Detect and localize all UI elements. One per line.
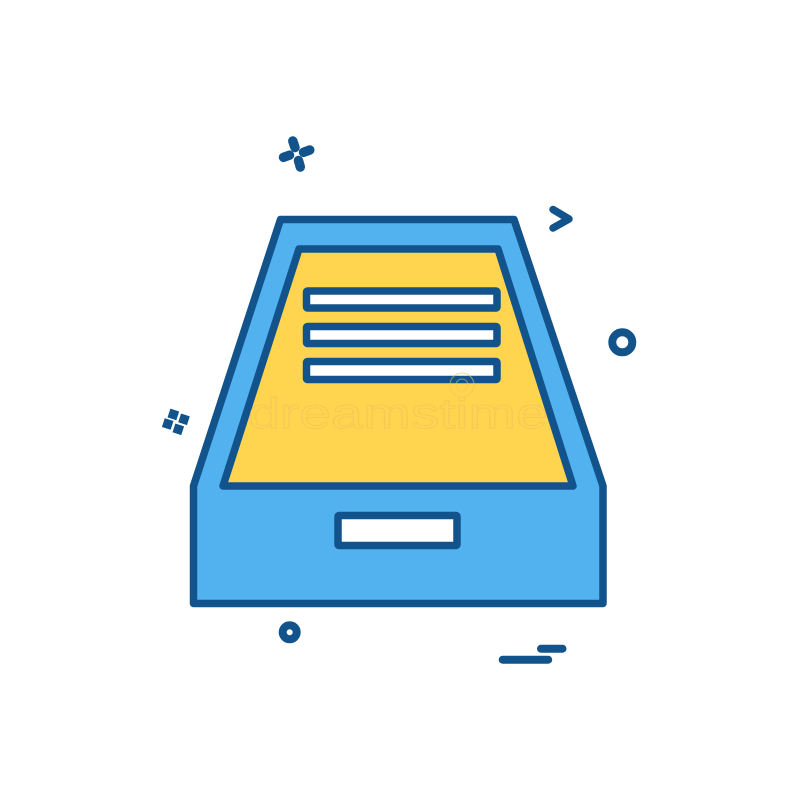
watermark logo [450,373,474,397]
drawer handle label [338,516,457,546]
icon: ring [612,332,632,352]
yellow paper sheet [223,249,573,486]
icon: file drawer tray [194,220,603,604]
watermark text: dreamstime [248,390,548,438]
text line 1 [306,291,497,308]
icon: chevron [553,210,569,228]
watermark [248,373,548,438]
icon: checker diamond [162,409,190,435]
text line 3 [306,362,497,380]
icon: four petal sparkle [284,141,310,167]
text line 2 [306,326,497,344]
icon: dash lines [499,645,566,664]
icon: small disc [283,625,297,639]
drawer body [194,220,603,604]
